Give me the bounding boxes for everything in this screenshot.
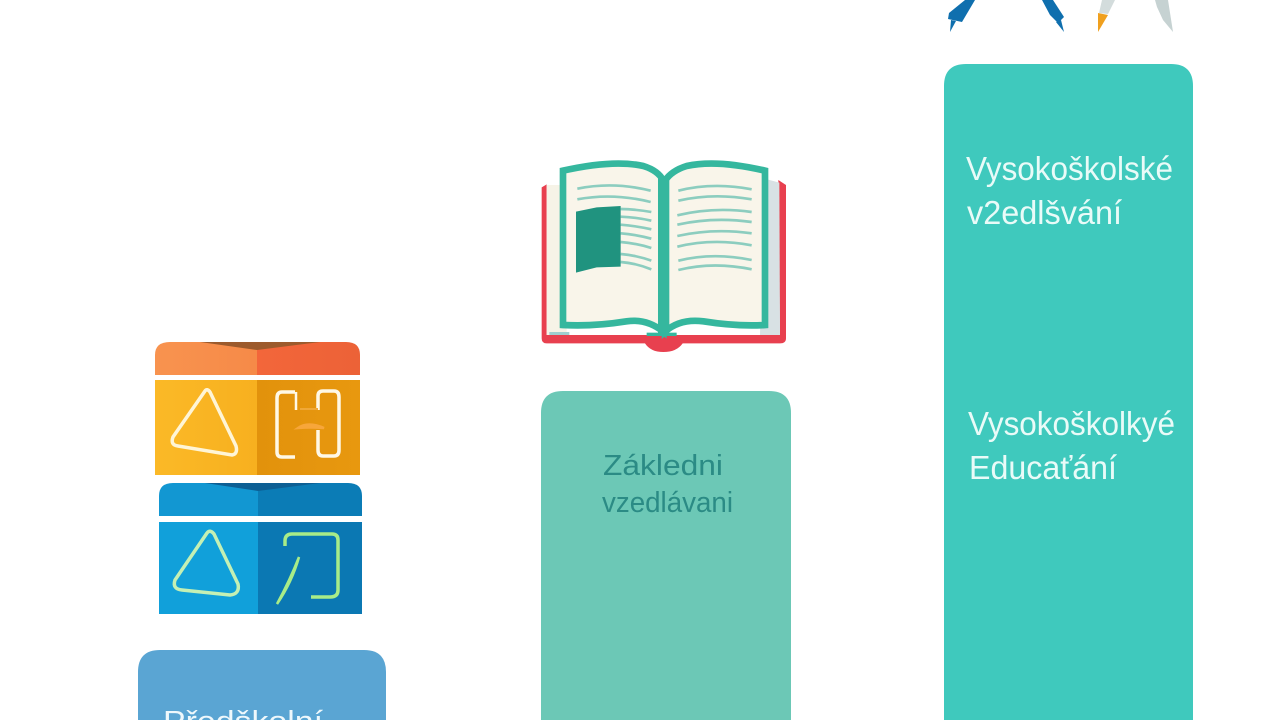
icon: compass tips [948, 0, 1173, 32]
heading: higher education variant: Vysokoškolkyé [968, 405, 1175, 442]
heading: higher education Czech: Vysokoškolské [966, 150, 1173, 187]
heading: primary education: vzedlávani [602, 487, 733, 519]
panel: preschool education [138, 650, 386, 720]
icon: open book [542, 164, 786, 352]
icon: blue toy block [159, 483, 362, 614]
heading: higher education variant: Educaťání [969, 449, 1117, 486]
panel: primary education [541, 391, 791, 720]
icon: orange toy block [155, 342, 360, 475]
panel: higher education [944, 64, 1193, 720]
heading: higher education Czech [966, 150, 1173, 231]
heading: primary education [602, 450, 733, 519]
heading: primary education: Zákledni [603, 450, 723, 482]
heading: higher education variant [968, 405, 1175, 486]
heading: higher education Czech: v2edlšvání [967, 194, 1122, 231]
